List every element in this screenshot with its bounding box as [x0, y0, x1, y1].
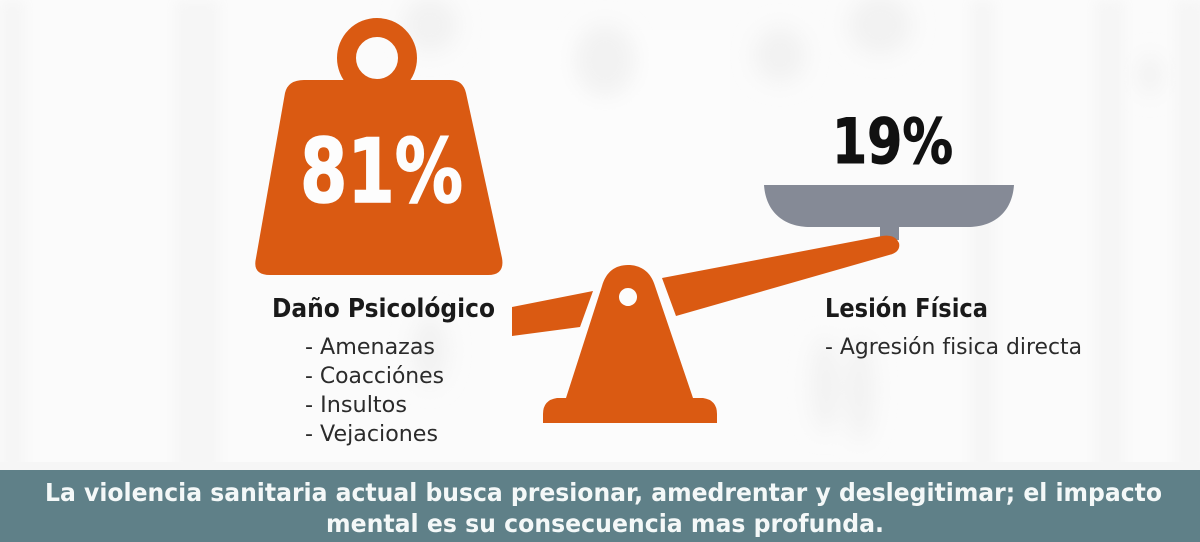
footer banner: [0, 470, 1200, 542]
footer text: [45, 478, 1162, 538]
icon: balance scale: [512, 236, 899, 423]
list: psychological harm items: - Coacciónes: [305, 364, 444, 389]
beam left: [512, 291, 593, 336]
fulcrum: [543, 265, 717, 423]
icon: orange weight: [255, 28, 502, 275]
footer text: La violencia sanitaria actual busca presionar, amedrentar y deslegitimar; el impacto: [45, 478, 1162, 507]
list: physical injury item: - Agresión fisica directa: [825, 335, 1082, 360]
footer text: mental es su consecuencia mas profunda.: [326, 509, 884, 538]
heading: Lesión Física: Lesión Física: [825, 294, 988, 324]
list: psychological harm items: - Vejaciones: [305, 422, 438, 447]
beam right: [662, 236, 899, 316]
panel: psychological harm: [272, 294, 495, 447]
heading: Daño Psicológico: Daño Psicológico: [272, 294, 495, 324]
panel: physical injury: [825, 294, 1082, 360]
list: psychological harm items: - Insultos: [305, 393, 407, 418]
list: psychological harm items: - Amenazas: [305, 335, 435, 360]
stat: 81%: 81%: [300, 120, 463, 223]
list: psychological harm items: [305, 335, 444, 447]
stat: 19%: 19%: [832, 105, 953, 178]
icon: grey scale pan: [764, 185, 1014, 240]
